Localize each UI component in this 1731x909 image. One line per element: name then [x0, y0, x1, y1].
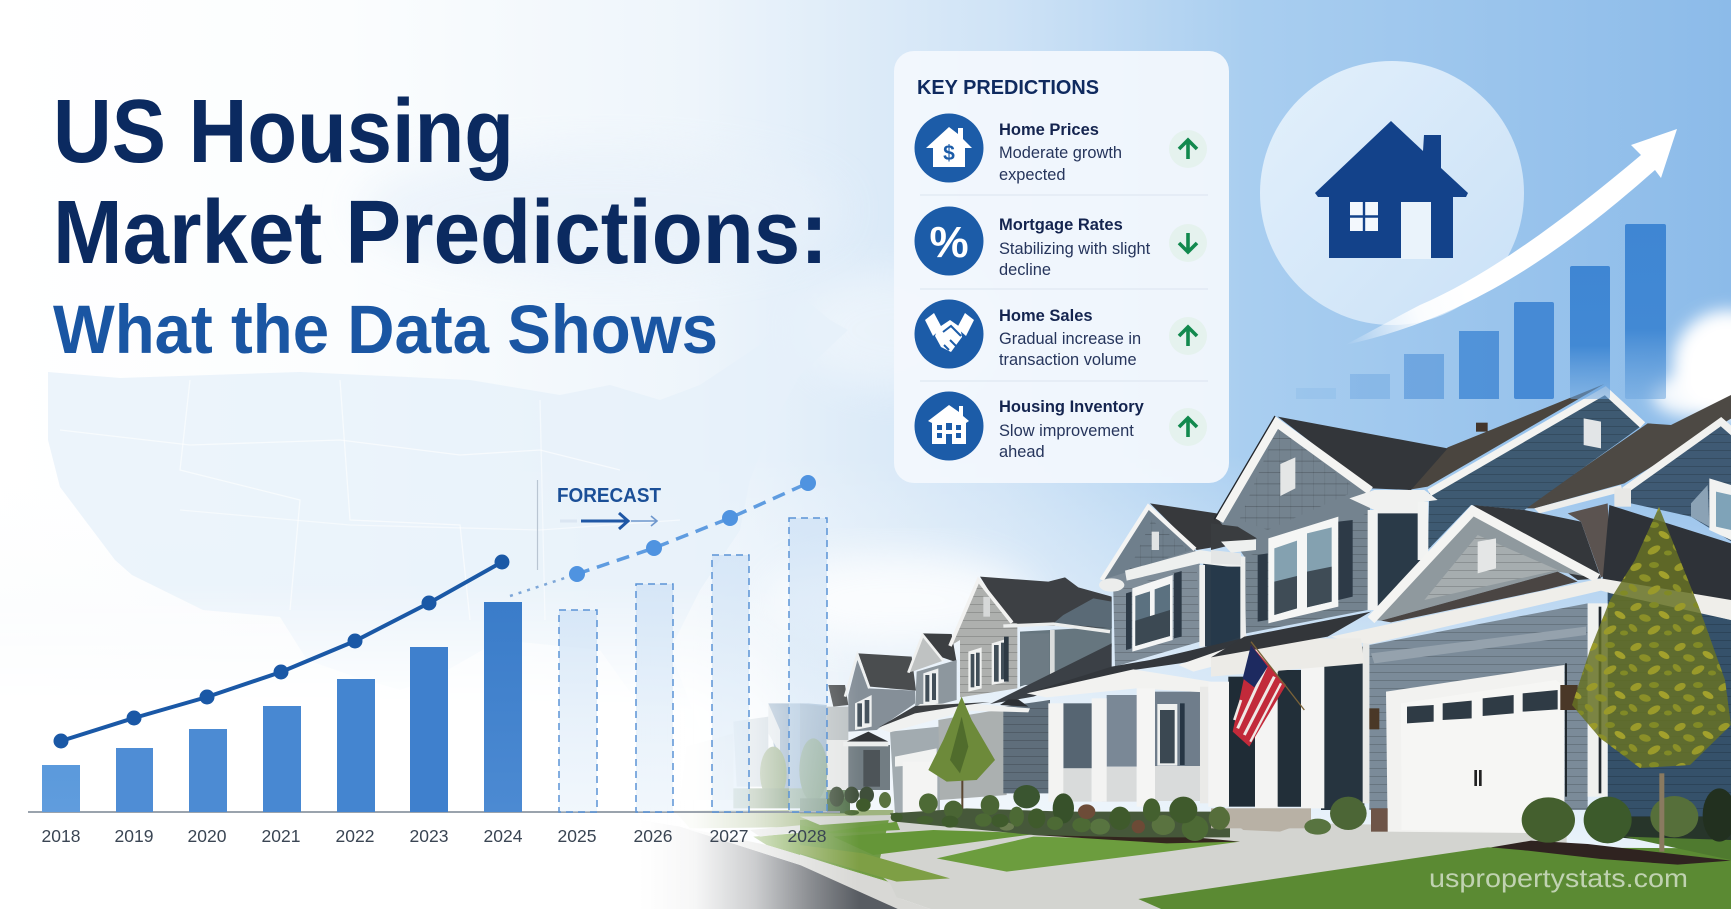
year labels: 2021 — [262, 826, 300, 846]
row: home sales: Gradual increase in — [999, 330, 1141, 348]
year labels: 2026 — [634, 826, 672, 846]
distant house and tree — [799, 685, 850, 813]
lawn, driveway and road — [800, 815, 1731, 909]
row: home sales: Home Sales — [999, 307, 1093, 325]
house 2 — [829, 653, 916, 807]
forecast divider — [536, 480, 538, 570]
row: home sales — [914, 300, 1207, 369]
garage wall and door — [1363, 590, 1731, 833]
axis line — [28, 811, 840, 813]
year labels: 2023 — [410, 826, 448, 846]
gable A body — [1099, 503, 1257, 667]
shrub bed — [890, 808, 1230, 837]
row: home prices: expected — [999, 166, 1066, 184]
white fade over the photo left edge — [291, 632, 852, 909]
forecast dashed bars 2025-2028 — [559, 518, 827, 812]
forecast arrow — [560, 513, 657, 529]
lower roof above porches — [1027, 623, 1320, 693]
icon: up arrow badge — [1169, 408, 1207, 446]
foundation shrubs — [844, 785, 1231, 841]
American flag — [1233, 642, 1304, 747]
hip roofs behind garage gable — [1473, 503, 1731, 602]
year labels: 2028 — [788, 826, 826, 846]
far faded houses and street (left of photo) — [640, 703, 940, 909]
row: home prices: Home Prices — [999, 121, 1099, 139]
right porch — [1178, 638, 1320, 832]
base and dark planting bed — [1371, 808, 1731, 860]
row: mortgage rates: Mortgage Rates — [999, 216, 1123, 234]
panel heading: KEY PREDICTIONS — [917, 77, 1099, 99]
icon: house — [1315, 121, 1468, 259]
garden beds and shrubs by the garage — [1209, 773, 1731, 865]
icon: percent — [914, 206, 984, 276]
right tree — [1572, 507, 1731, 768]
headline: US Housing — [53, 82, 514, 182]
icon: up arrow badge — [1169, 130, 1207, 168]
photo: garage gable and gutter — [1211, 511, 1731, 677]
year labels: 2018 — [42, 826, 80, 846]
left porch — [1027, 669, 1211, 807]
row: mortgage rates: decline — [999, 261, 1051, 279]
chart: historical and forecast bars with trend line — [28, 475, 840, 846]
historical bars 2018-2024 — [42, 602, 522, 812]
year labels: 2022 — [336, 826, 374, 846]
icon: handshake — [914, 300, 984, 368]
row: mortgage rates — [914, 206, 1207, 279]
watermark: site name: uspropertystats.com — [1429, 863, 1688, 893]
year labels: 2025 — [558, 826, 596, 846]
small tree — [928, 697, 995, 823]
row: housing inventory — [914, 392, 1207, 461]
headline: Market Predictions: — [53, 183, 828, 283]
year labels: 2024 — [484, 826, 523, 846]
small bar chart top right — [1296, 224, 1666, 399]
entry interior and column — [1211, 647, 1364, 828]
forecast label: FORECAST — [557, 485, 661, 507]
year labels: 2019 — [115, 826, 153, 846]
roofs and blue gable — [1378, 384, 1731, 607]
row: mortgage rates: Stabilizing with slight — [999, 240, 1151, 258]
year labels: 2027 — [710, 826, 748, 846]
forecast dashed trend line — [510, 475, 816, 596]
historical trend line — [54, 554, 510, 748]
icon: house with dollar: $ — [943, 142, 955, 165]
photo: garage block — [1211, 590, 1731, 860]
gable B — [1211, 416, 1448, 647]
photo: upper houses and roofs — [1211, 384, 1731, 647]
icon: house with dollar — [914, 114, 984, 182]
year labels: 2020 — [188, 826, 227, 846]
icon: percent: % — [929, 218, 969, 267]
headline — [53, 82, 828, 283]
year labels — [42, 826, 826, 846]
photo: porches — [844, 623, 1320, 841]
photo: left houses — [799, 503, 1257, 823]
subtitle: What the Data Shows — [53, 291, 718, 368]
panel: key predictions — [894, 51, 1229, 483]
rising arrow — [1345, 129, 1677, 345]
icon: down arrow badge — [1169, 224, 1207, 262]
house 4 — [950, 577, 1112, 697]
row: housing inventory: ahead — [999, 443, 1045, 461]
icon: house with windows — [914, 392, 984, 460]
row: housing inventory: Housing Inventory — [999, 398, 1145, 416]
row: home prices: Moderate growth — [999, 144, 1122, 162]
row: home sales: transaction volume — [999, 351, 1137, 369]
icon: up arrow badge — [1169, 317, 1207, 355]
lower garage section — [878, 643, 1112, 815]
house 3 — [908, 633, 957, 711]
cloud: right edge — [1652, 310, 1731, 420]
circle with house icon — [1260, 61, 1524, 325]
watermark US map — [48, 295, 848, 730]
row: housing inventory: Slow improvement — [999, 422, 1134, 440]
row: home prices — [914, 114, 1207, 184]
